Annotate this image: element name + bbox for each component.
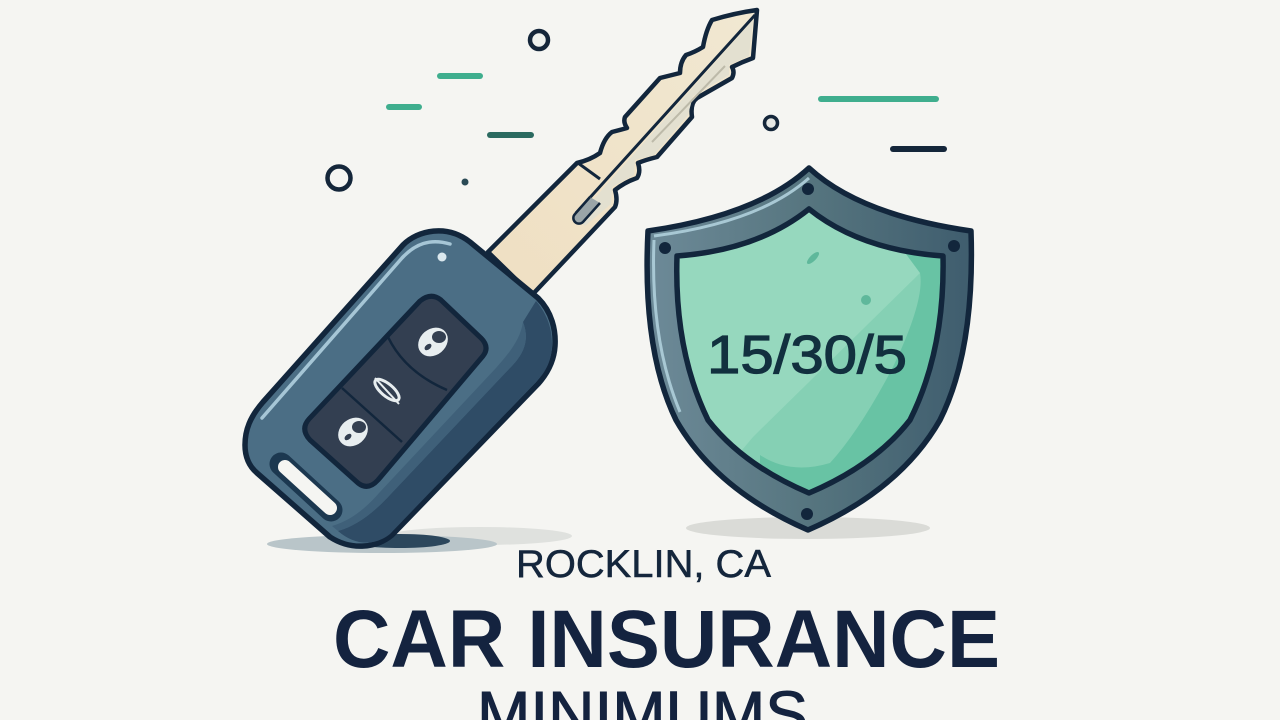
subtitle: location: ROCKLIN, CA (516, 543, 771, 586)
shield face outline (677, 209, 943, 493)
button dividers (342, 337, 447, 442)
shield face shading (742, 254, 940, 490)
icon: key fob (245, 231, 555, 546)
fob darker side (338, 301, 552, 543)
ground shadows (267, 517, 930, 553)
shield rivets (659, 183, 960, 520)
fob highlight (262, 242, 450, 418)
shield frame (647, 168, 971, 530)
shield green face (677, 209, 943, 493)
icon: shield (647, 168, 971, 530)
unlock icon (412, 322, 454, 362)
shield specks (805, 250, 871, 305)
key ring slot (281, 464, 331, 510)
lock icon (332, 412, 374, 452)
shield value: 15/30/5 (707, 325, 907, 385)
icon: car key blade (488, 10, 757, 295)
title: car insurance: CAR INSURANCE (333, 594, 1000, 685)
fob body (245, 231, 555, 546)
decorative accents: circles and dashes (328, 31, 944, 190)
infographic canvas (242, 8, 997, 720)
fob button panel (305, 296, 486, 486)
shield frame highlight (654, 178, 809, 412)
fob mid side (332, 322, 526, 531)
trunk icon (372, 376, 402, 404)
fob status light (438, 252, 446, 262)
